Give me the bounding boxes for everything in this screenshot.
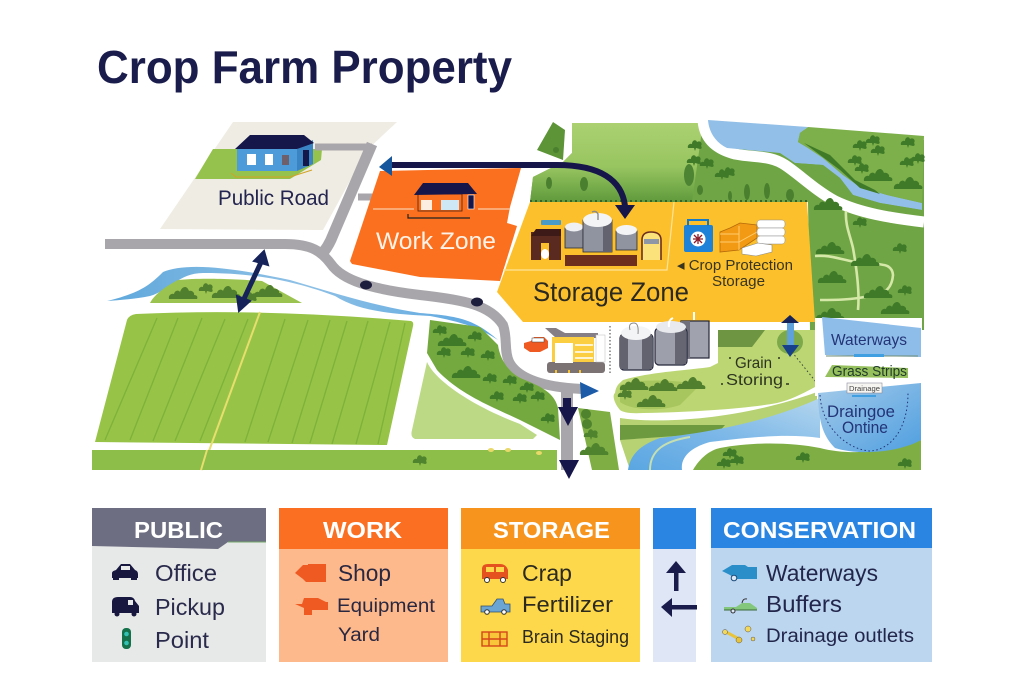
panel: public legend: Pickup	[155, 594, 225, 620]
riparian island	[150, 279, 302, 303]
icon: storage buildings and silos	[531, 211, 661, 266]
label: crop protection storage	[677, 257, 793, 290]
panel: storage legend	[461, 508, 640, 662]
drainage outline area: Drainage	[849, 386, 880, 393]
upper river	[708, 120, 922, 210]
drainage outline area: Ontine	[842, 418, 888, 437]
icon: office building	[231, 135, 314, 177]
drainage outline area	[818, 383, 921, 452]
label: grain storing	[721, 355, 789, 389]
arrow: road exit east	[580, 382, 599, 399]
panel: public road parcel	[160, 122, 397, 230]
icon: grain truck	[482, 632, 507, 646]
panel: storage legend: Crap	[522, 560, 572, 586]
pale meadow band	[620, 392, 817, 470]
label: drainage outline: Draingoe	[827, 402, 895, 421]
panel: storage zone	[497, 202, 815, 322]
label: crop protection storage: ◂ Crop Protection	[677, 257, 793, 274]
icon: up arrow	[666, 561, 686, 591]
lower landscape	[578, 392, 921, 470]
small sign	[847, 383, 882, 393]
icon: equipment shed and truck	[524, 326, 610, 375]
heading: WORK	[323, 517, 402, 543]
panel: conservation legend: Buffers	[766, 591, 842, 617]
icon: crop protection	[684, 220, 713, 252]
legend waterways panel	[815, 317, 922, 396]
icon: signal	[122, 628, 131, 649]
icon: waterway	[722, 565, 757, 581]
panel: work legend: Equipment	[337, 596, 436, 617]
office lawn	[195, 149, 322, 179]
heading: PUBLIC	[134, 517, 223, 543]
panel: crop field	[95, 312, 413, 470]
arrow: south exit	[558, 398, 579, 479]
icon: pickup truck	[481, 599, 510, 614]
light meadow	[411, 362, 537, 439]
heading: STORAGE	[493, 517, 610, 543]
lower river	[628, 398, 820, 470]
mid green base	[530, 123, 924, 330]
icon: buffer	[724, 599, 757, 613]
heading: CONSERVATION	[723, 517, 916, 543]
right island	[798, 127, 924, 203]
vehicles on road	[360, 280, 483, 306]
panel: public legend	[92, 508, 266, 662]
forest buffer	[411, 320, 560, 440]
white access lane	[703, 120, 924, 222]
river and creek	[107, 267, 498, 340]
title: Crop Farm Property	[97, 41, 512, 93]
label: waterways: Waterways	[831, 332, 907, 349]
panel: right green paths and trees	[815, 211, 912, 320]
panel: work legend	[279, 508, 448, 662]
south bank	[693, 440, 921, 470]
field track	[202, 312, 260, 470]
double arrow: grain access	[781, 315, 820, 387]
panel: conservation legend	[711, 508, 932, 662]
icon: equipment truck	[295, 598, 328, 615]
panel: grain storing area	[614, 330, 815, 413]
bottom field strip	[92, 448, 557, 470]
panel: storage legend: Fertilizer	[522, 592, 613, 617]
icon: left arrow	[661, 598, 697, 617]
middle strip	[795, 163, 922, 214]
icon: grain silos	[620, 312, 709, 370]
label: grain storing: Grain	[735, 355, 772, 372]
panel: public legend: Office	[155, 560, 217, 586]
icon: pickup	[112, 597, 139, 616]
panel: public legend: Point	[155, 627, 210, 653]
panel: conservation legend: Drainage outlets	[766, 626, 914, 647]
icon: stacked fertilizer bags	[720, 220, 785, 256]
label: storage zone: Storage Zone	[533, 277, 689, 307]
curved arrow: work zone to storage	[379, 156, 635, 219]
label: public road: Public Road	[218, 187, 329, 210]
icon: shop tool	[295, 564, 326, 582]
panel: storage legend: Brain Staging	[522, 627, 629, 647]
panel: work legend: Yard	[338, 625, 380, 646]
double arrow: road to field	[237, 251, 268, 311]
road network	[105, 144, 582, 470]
panel: arrows legend	[653, 508, 697, 662]
icon: car	[112, 564, 138, 580]
panel: right landscape top	[530, 120, 925, 330]
icon: drainage	[722, 626, 755, 643]
label: work zone: Work Zone	[376, 228, 496, 255]
label: crop protection storage: Storage	[712, 273, 765, 290]
panel: conservation legend: Waterways	[766, 560, 878, 586]
label: grain storing: Storing	[726, 372, 783, 389]
icon: van	[482, 564, 508, 582]
label: grass strips: Grass Strips	[832, 363, 907, 380]
panel: work zone	[350, 168, 521, 281]
icon: shop	[408, 183, 477, 218]
panel: work legend: Shop	[338, 560, 391, 586]
